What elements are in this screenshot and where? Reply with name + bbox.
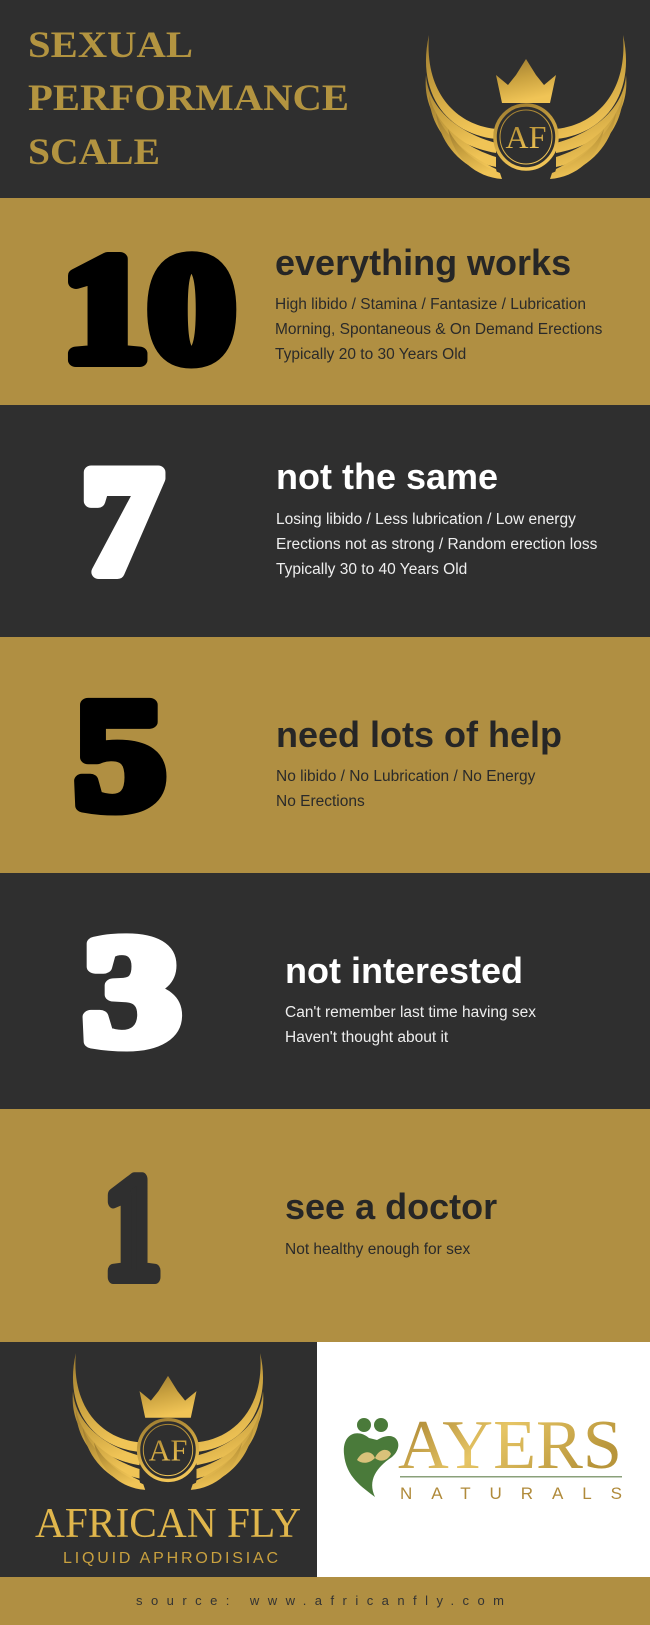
logo: header winged AF: AF <box>506 119 546 155</box>
text block: Typically 30 to 40 Years Old <box>276 561 467 578</box>
logo: header winged AF <box>426 35 626 179</box>
title: SCALE <box>28 132 160 173</box>
number 10: 10 <box>62 225 235 394</box>
text block: Can't remember last time having sex <box>285 1004 536 1021</box>
heading: need lots of help <box>276 714 562 755</box>
number 5: 5 <box>75 668 165 841</box>
text block: Haven't thought about it <box>285 1029 448 1046</box>
heading: not the same <box>276 456 498 497</box>
panel: 5 need lots of help <box>0 637 650 873</box>
panel: 1 see a doctor <box>0 1109 650 1342</box>
logo: Ayers Naturals: NATURALS <box>400 1484 622 1503</box>
number 3: 3 <box>84 905 180 1077</box>
number 1: 1 <box>104 1146 161 1310</box>
text block: Morning, Spontaneous & On Demand Erections <box>275 321 602 338</box>
logo: African Fly <box>35 1354 301 1567</box>
text block: Not healthy enough for sex <box>285 1241 470 1258</box>
heading: see a doctor <box>285 1186 497 1227</box>
text block: Erections not as strong / Random erection loss <box>276 536 597 553</box>
heading: everything works <box>275 242 571 283</box>
panel: source strip <box>0 1577 650 1625</box>
title: SEXUAL <box>28 25 193 66</box>
text block: High libido / Stamina / Fantasize / Lubrication <box>275 296 586 313</box>
panel: 7 not the same <box>0 405 650 637</box>
text block <box>276 768 536 810</box>
logo: African Fly: AF <box>149 1433 187 1467</box>
text block: No libido / No Lubrication / No Energy <box>276 768 535 785</box>
panel: 10 everything works <box>0 198 650 405</box>
logo: African Fly: LIQUID APHRODISIAC <box>63 1550 278 1567</box>
panel: footer logos <box>0 1342 650 1577</box>
logo: Ayers Naturals <box>317 1342 650 1577</box>
text block: Losing libido / Less lubrication / Low energy <box>276 511 576 528</box>
source text: source: www.africanfly.com <box>136 1593 504 1608</box>
text block: Typically 20 to 30 Years Old <box>275 346 466 363</box>
text block <box>275 296 602 363</box>
title <box>28 25 349 173</box>
logo: African Fly: AFRICAN FLY <box>35 1501 301 1547</box>
panel: 3 not interested <box>0 873 650 1109</box>
number 7: 7 <box>82 437 162 605</box>
text block <box>276 511 597 578</box>
heading: not interested <box>285 950 523 991</box>
header background <box>0 0 650 198</box>
title: PERFORMANCE <box>28 78 349 119</box>
logo: Ayers Naturals: AYERS <box>398 1407 622 1484</box>
text block: No Erections <box>276 793 365 810</box>
text block <box>285 1004 536 1046</box>
